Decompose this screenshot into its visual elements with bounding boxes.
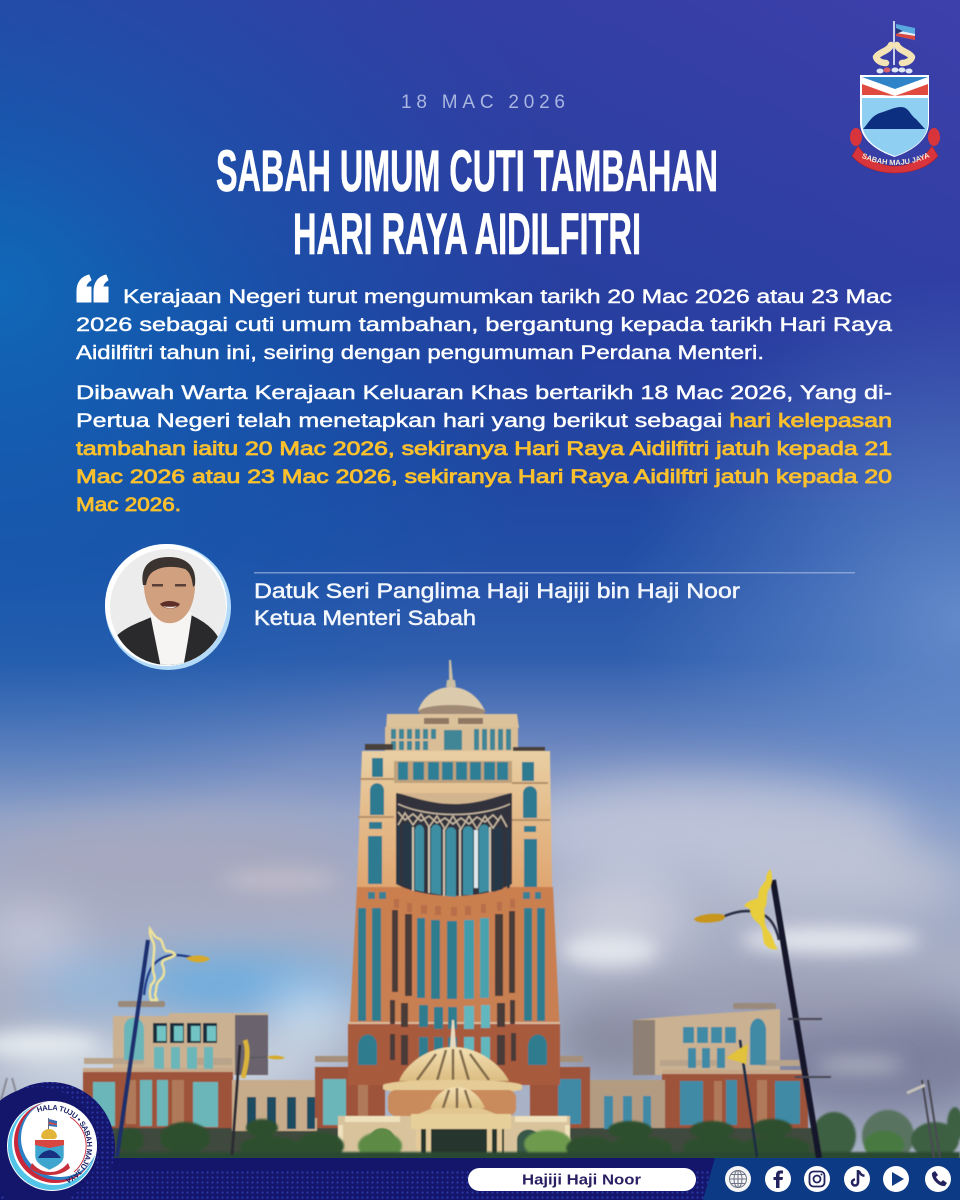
title: HARI RAYA AIDILFITRI: [293, 202, 641, 267]
icon: facebook: [765, 1166, 791, 1192]
crest shield: [860, 75, 930, 158]
attribution: Ketua Menteri Sabah: [254, 606, 476, 630]
date: 18 MAC 2026: [401, 92, 565, 113]
right wing: [530, 1003, 820, 1158]
logo badge: HALA TUJU • SABAH MAJU JAYA: [36, 1104, 92, 1183]
small street lamps: [1, 1040, 940, 1158]
title: [216, 139, 718, 267]
icon: phone: [925, 1166, 951, 1192]
central domes and portico: [338, 1020, 570, 1158]
divider line: [254, 572, 855, 574]
icon: video play: [883, 1166, 909, 1192]
right street lamp: [694, 869, 831, 1158]
quote paragraph 2: Mac 2026 atau 23 Mac 2026, sekiranya Hari Raya Aidilftri jatuh kepada 20: [76, 466, 892, 488]
clouds: [0, 780, 960, 1120]
crest ribbon: SABAH MAJU JAYA: [862, 153, 930, 166]
left street lamp: [117, 929, 210, 1157]
logo badge: [0, 1082, 115, 1198]
name pill: Hajiji Haji Noor: [522, 1172, 641, 1188]
trees and ground planting: [0, 1107, 960, 1162]
quote paragraph 2: Mac 2026.: [76, 494, 181, 516]
footer band: [0, 1158, 960, 1200]
name pill: [468, 1168, 696, 1191]
social icons: [725, 1166, 951, 1192]
badge crest: [30, 1118, 70, 1175]
icon: website globe: [725, 1166, 751, 1192]
arched curtain wall: [396, 793, 512, 897]
attribution: [254, 579, 740, 630]
icon: tiktok: [844, 1166, 870, 1192]
icon: instagram: [804, 1166, 830, 1192]
quote paragraph 1: 2026 sebagai cuti umum tambahan, bergantung kepada tarikh Hari Raya: [76, 314, 892, 336]
government building: [83, 660, 820, 1158]
portrait: [105, 544, 231, 670]
quote paragraph 1: Kerajaan Negeri turut mengumumkan tarikh 20 Mac 2026 atau 23 Mac: [123, 286, 892, 308]
state crest: [850, 21, 940, 174]
quote paragraph 1: [76, 286, 892, 364]
tower vertical windows: [358, 908, 547, 1065]
icon: quotation mark: [77, 275, 108, 302]
quote paragraph 2: tambahan iaitu 20 Mac 2026, sekiranya Hari Raya Aidilfitri jatuh kepada 21: [76, 438, 892, 460]
quote paragraph 2: [76, 382, 892, 516]
crest ribbon: [850, 128, 940, 174]
quote paragraph 2: Pertua Negeri telah menetapkan hari yang berikut sebagai hari kelepasan: [76, 410, 892, 432]
crest beads: [876, 68, 912, 74]
main tower: [348, 660, 560, 1085]
quote paragraph 1: Aidilfitri tahun ini, seiring dengan pengumuman Perdana Menteri.: [76, 342, 764, 364]
quote paragraph 2: Dibawah Warta Kerajaan Keluaran Khas bertarikh 18 Mac 2026, Yang di-: [76, 382, 892, 404]
left wing: [83, 1001, 385, 1158]
crest hands: [876, 45, 912, 63]
crest flag: [893, 21, 915, 65]
attribution: Datuk Seri Panglima Haji Hajiji bin Haji Noor: [254, 579, 740, 603]
